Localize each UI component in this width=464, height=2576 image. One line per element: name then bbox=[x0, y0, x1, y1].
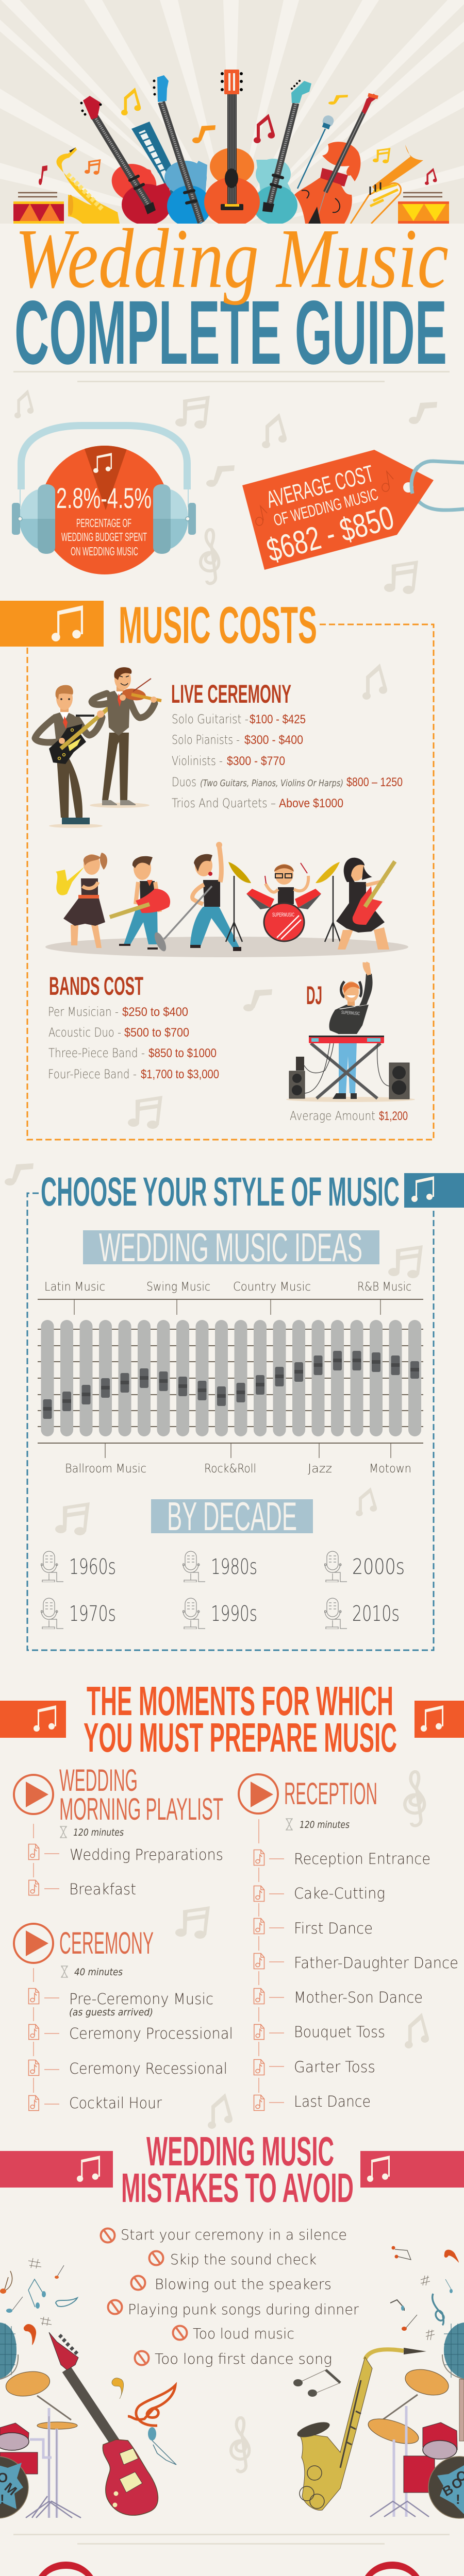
timeline bbox=[33, 1968, 34, 2093]
price list: $300 - $400 bbox=[244, 733, 303, 747]
duration: 120 minutes bbox=[300, 1819, 350, 1831]
orange disc bbox=[40, 446, 169, 574]
section: moments bbox=[0, 1678, 464, 2129]
item: pre-ceremony music: Pre-Ceremony Music bbox=[69, 1990, 213, 2008]
duration: 40 minutes bbox=[74, 1967, 123, 1978]
icon: note bbox=[411, 1176, 434, 1202]
headphones stat bbox=[12, 426, 196, 574]
right header tab bbox=[415, 1701, 464, 1738]
price list: $300 - $770 bbox=[227, 754, 285, 768]
price list: Solo Pianists - bbox=[172, 733, 240, 747]
drum kit: M bbox=[2, 2480, 20, 2499]
item: reception entrance: Reception Entrance bbox=[294, 1850, 430, 1868]
price list: Above $1000 bbox=[279, 796, 343, 810]
sax player bbox=[56, 853, 107, 948]
dark wedge bbox=[85, 446, 127, 510]
item: cake-cutting bbox=[254, 1885, 385, 1902]
item: mother-son dance: Mother-Son Dance bbox=[294, 1989, 423, 2006]
drum kit: B bbox=[440, 2481, 456, 2499]
bottom genre labels: Jazz bbox=[308, 1462, 332, 1476]
percentage text: 2.8%-4.5% bbox=[56, 482, 152, 514]
top genre labels: R&B Music bbox=[357, 1280, 411, 1294]
average amount: Average Amount bbox=[290, 1109, 375, 1123]
microphone bbox=[0, 2323, 18, 2379]
background notes: intro bbox=[14, 389, 437, 594]
heading bbox=[121, 2128, 354, 2211]
icon: note bbox=[93, 453, 112, 473]
item: garter toss bbox=[254, 2058, 375, 2076]
top genre labels: Latin Music bbox=[44, 1280, 105, 1294]
microphone bbox=[442, 2323, 464, 2441]
DJ block: DJ bbox=[306, 981, 322, 1010]
bottom genre labels: Motown bbox=[369, 1462, 411, 1476]
heading bbox=[59, 1763, 223, 1826]
item: breakfast bbox=[29, 1880, 136, 1898]
budget caption: ON WEDDING MUSIC bbox=[71, 545, 138, 558]
heading: RECEPTION bbox=[284, 1776, 377, 1811]
price list: $500 to $700 bbox=[124, 1026, 189, 1040]
decades grid: 1970s bbox=[69, 1601, 116, 1626]
left header tab bbox=[0, 1701, 66, 1738]
price list: $800 – 1250 bbox=[346, 775, 403, 789]
budget caption bbox=[61, 516, 147, 558]
bands cost text bbox=[48, 972, 219, 1081]
top genre labels: Swing Music bbox=[146, 1280, 210, 1294]
item: wedding preparations bbox=[29, 1844, 223, 1863]
price tag bbox=[242, 450, 464, 570]
drum kit: ! bbox=[0, 2492, 5, 2507]
price list: Trios And Quartets – bbox=[172, 796, 276, 810]
background notes bbox=[128, 664, 387, 1129]
guitar player bbox=[110, 856, 170, 950]
item: wedding preparations: Wedding Preparations bbox=[70, 1846, 223, 1863]
divider bbox=[13, 371, 450, 382]
item: last dance: Last Dance bbox=[294, 2093, 371, 2110]
bottom genre labels: Ballroom Music bbox=[65, 1462, 146, 1476]
tag shape bbox=[242, 450, 434, 570]
item 2: Skip the sound check bbox=[170, 2251, 317, 2268]
duration: 120 minutes bbox=[73, 1827, 124, 1838]
duration bbox=[60, 1826, 124, 1838]
scattered notes bbox=[390, 2246, 459, 2340]
background notes bbox=[175, 1772, 429, 2129]
illustration: notes centre bbox=[112, 2370, 340, 2472]
section: mistakes bbox=[0, 2128, 464, 2518]
woman with guitar bbox=[336, 858, 395, 950]
decades grid bbox=[41, 1551, 405, 1629]
illustration: DJ bbox=[286, 962, 415, 1102]
illustration: violinist bbox=[90, 667, 161, 808]
item: garter toss: Garter Toss bbox=[294, 2058, 375, 2076]
bottom genre labels: Rock&Roll bbox=[204, 1462, 256, 1476]
subheading: BANDS COST bbox=[49, 972, 143, 1001]
icon: saxophone bbox=[56, 147, 120, 224]
item: bouquet toss bbox=[254, 2023, 385, 2041]
banner: by decade bbox=[151, 1494, 313, 1539]
singer bbox=[152, 842, 241, 953]
price list: Four-Piece Band - bbox=[48, 1067, 137, 1081]
illustration: guitarist bbox=[35, 685, 112, 828]
icon: note bbox=[52, 605, 83, 641]
bottom genre labels bbox=[65, 1462, 411, 1476]
item 1: Start your ceremony in a silence bbox=[121, 2226, 347, 2243]
section: music costs bbox=[0, 597, 434, 1140]
headphone band bbox=[21, 426, 187, 489]
divider bbox=[13, 2534, 450, 2545]
tag text: AVERAGE COST bbox=[263, 460, 376, 513]
price list: $1,700 to $3,000 bbox=[141, 1067, 219, 1081]
icon: microphone stand bbox=[297, 114, 335, 189]
tag text bbox=[263, 460, 398, 569]
ceremony block bbox=[14, 1924, 233, 2112]
icon: left drum bbox=[13, 193, 64, 224]
heading: WEDDING bbox=[59, 1763, 138, 1798]
item: pre-ceremony music bbox=[29, 1989, 213, 2018]
dashed frame bbox=[27, 1193, 434, 1650]
price list bbox=[172, 712, 403, 810]
item 3: Blowing out the speakers bbox=[155, 2276, 332, 2293]
decades grid: 2000s bbox=[352, 1554, 405, 1579]
illustration: left band gear bbox=[0, 2258, 81, 2518]
background notes bbox=[5, 1163, 423, 1535]
average amount: $1,200 bbox=[379, 1109, 408, 1123]
item 6: Too long first dance song bbox=[155, 2350, 332, 2367]
top genre labels: Country Music bbox=[233, 1280, 311, 1294]
top genre labels bbox=[44, 1280, 411, 1294]
duration bbox=[61, 1966, 123, 1978]
mistakes list bbox=[101, 2226, 359, 2367]
price list: Acoustic Duo - bbox=[48, 1025, 121, 1040]
item: first dance: First Dance bbox=[294, 1920, 373, 1937]
morning playlist block bbox=[14, 1763, 223, 1898]
subheading: LIVE CEREMONY bbox=[171, 680, 291, 708]
item 4: Playing punk songs during dinner bbox=[128, 2301, 359, 2318]
price list: Three-Piece Band - bbox=[48, 1046, 145, 1060]
item: father-daughter dance: Father-Daughter Dance bbox=[294, 1954, 458, 1972]
icon: play bbox=[239, 1774, 278, 1814]
price list: $100 - $425 bbox=[250, 713, 306, 726]
dashed frame bbox=[27, 624, 434, 1140]
section: choose your style bbox=[5, 1163, 464, 1650]
icon: keyboard bbox=[131, 122, 173, 195]
budget caption: WEDDING BUDGET SPENT bbox=[61, 530, 147, 544]
item: ceremony processional: Ceremony Processional bbox=[69, 2025, 233, 2042]
decades grid: 1980s bbox=[211, 1554, 257, 1579]
icon: teal guitar bbox=[253, 80, 311, 225]
icon: header music notes bbox=[39, 88, 437, 185]
reception block bbox=[239, 1774, 458, 2110]
tag text: $682 - $850 bbox=[263, 499, 398, 569]
item: breakfast: Breakfast bbox=[69, 1880, 136, 1898]
icon: play bbox=[14, 1775, 53, 1814]
icon: right drum bbox=[398, 193, 449, 224]
illustration: DJ: SUPERMUSIC bbox=[341, 1010, 360, 1016]
price list: Duos bbox=[172, 775, 196, 789]
title block bbox=[14, 211, 449, 383]
slider tracks bbox=[41, 1320, 421, 1436]
header tab bbox=[0, 601, 104, 647]
price list: $850 to $1000 bbox=[148, 1046, 217, 1060]
tag text: OF WEDDING MUSIC bbox=[272, 485, 380, 530]
stage shadow bbox=[45, 937, 408, 957]
price list: (Two Guitars, Pianos, Violins Or Harps) bbox=[200, 778, 343, 789]
header tab bbox=[404, 1173, 464, 1208]
drum kit: ! bbox=[456, 2492, 460, 2507]
icon: violin bbox=[294, 94, 378, 224]
illustration: right band gear bbox=[366, 2246, 464, 2518]
item: ceremony recessional: Ceremony Recessional bbox=[69, 2060, 227, 2077]
drummer: SUPERMUSIC bbox=[272, 912, 294, 918]
icon: red guitar bbox=[80, 96, 173, 225]
item: first dance bbox=[254, 1919, 373, 1937]
budget caption: PERCENTAGE OF bbox=[76, 516, 131, 530]
icon: blue guitar bbox=[153, 75, 211, 227]
header sunburst bbox=[0, 0, 464, 232]
illustration: band bbox=[45, 842, 408, 957]
slider knobs bbox=[43, 1351, 419, 1419]
item: cocktail hour: Cocktail Hour bbox=[69, 2094, 162, 2112]
banner: by decade: BY DECADE bbox=[167, 1494, 297, 1539]
tag notes bbox=[256, 471, 393, 526]
icon: orange guitar bbox=[204, 70, 260, 227]
icon: right headphones bbox=[358, 2562, 426, 2576]
icon: play bbox=[14, 1924, 53, 1963]
decades grid: 1990s bbox=[211, 1601, 257, 1626]
item: last dance bbox=[254, 2093, 371, 2110]
decades grid: 1960s bbox=[69, 1554, 116, 1579]
heading bbox=[84, 1678, 397, 1760]
item 5: Too loud music bbox=[193, 2325, 294, 2342]
timeline bbox=[33, 1824, 34, 1877]
scattered notes bbox=[0, 2258, 77, 2345]
right ear cup bbox=[153, 484, 196, 554]
live ceremony text bbox=[171, 680, 403, 810]
heading: CEREMONY bbox=[59, 1926, 154, 1960]
item: pre-ceremony music: (as guests arrived) bbox=[69, 2007, 153, 2018]
left header tab bbox=[0, 2151, 113, 2188]
price list: $250 to $400 bbox=[122, 1005, 188, 1019]
item: cocktail hour bbox=[29, 2094, 162, 2112]
right header tab bbox=[360, 2151, 464, 2188]
price list: Violinists - bbox=[172, 754, 223, 768]
duration bbox=[286, 1819, 350, 1831]
instruments illustration bbox=[13, 70, 449, 227]
tag string bbox=[412, 461, 464, 510]
DJ block bbox=[286, 962, 415, 1123]
heading: MORNING PLAYLIST bbox=[59, 1792, 223, 1826]
timeline bbox=[258, 1819, 259, 2093]
icon: left headphones bbox=[32, 2562, 100, 2576]
item: bouquet toss: Bouquet Toss bbox=[294, 2023, 385, 2041]
decades grid: 2010s bbox=[352, 1601, 400, 1626]
illustration: electric guitar bbox=[49, 2332, 158, 2515]
icon: trumpet bbox=[351, 145, 423, 224]
price list: Solo Guitarist - bbox=[172, 712, 248, 726]
mixer chart bbox=[38, 1299, 423, 1458]
drum kit bbox=[0, 2368, 81, 2518]
drummer bbox=[226, 862, 340, 942]
price list: Per Musician - bbox=[48, 1005, 119, 1019]
illustration: saxophone bbox=[295, 2348, 426, 2510]
price list bbox=[48, 1005, 219, 1081]
drum kit bbox=[366, 2365, 464, 2518]
listen on the blog bbox=[32, 2562, 426, 2576]
item: cake-cutting: Cake-Cutting bbox=[294, 1885, 385, 1902]
left ear cup bbox=[12, 484, 55, 554]
